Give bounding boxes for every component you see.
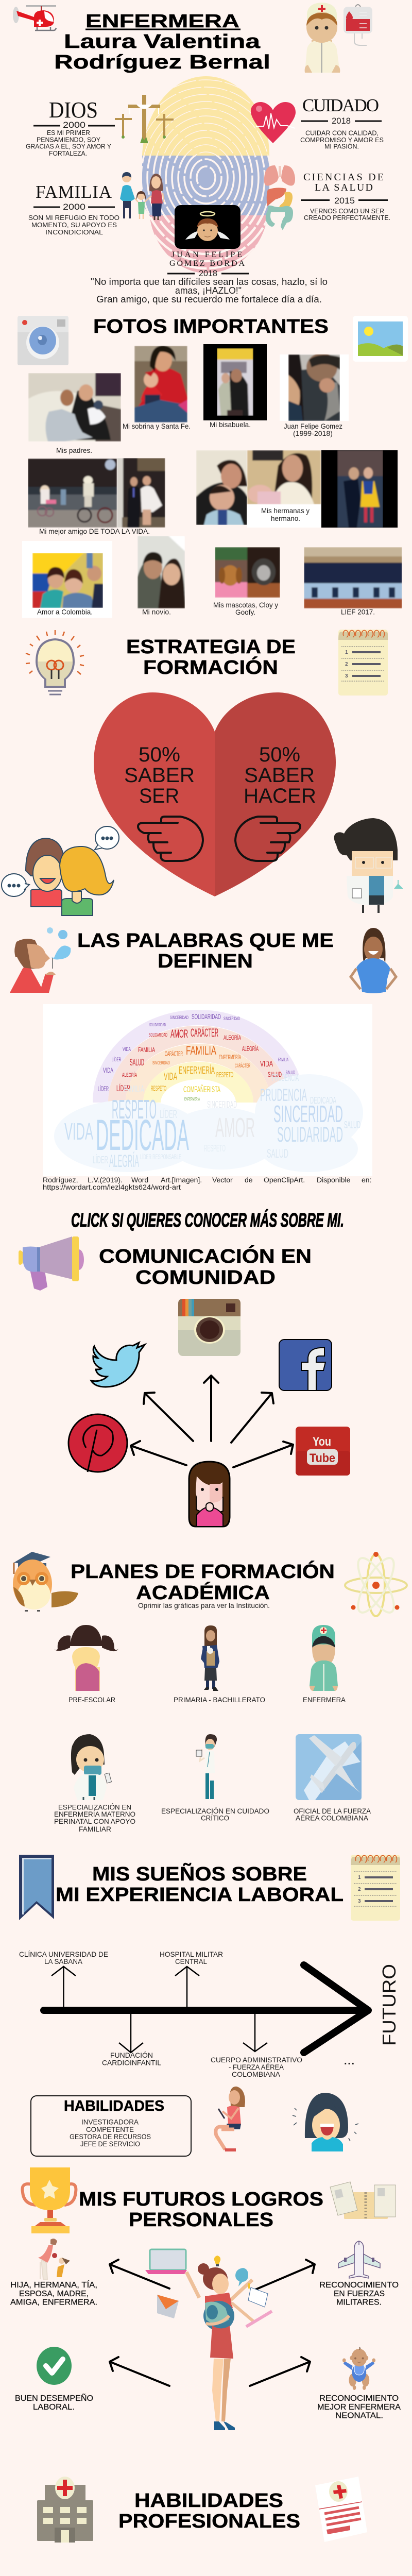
milestones: FUNDACIÓN xyxy=(110,2051,153,2059)
photo: mi novio xyxy=(138,536,185,608)
title: Laura Valentina xyxy=(64,31,261,53)
milestones: COLOMBIANA xyxy=(232,2070,281,2078)
captions: row 3 xyxy=(37,601,375,616)
labels: formacion row 1: PRIMARIA - BACHILLERATO xyxy=(174,1696,265,1704)
label: familia futura: HIJA, HERMANA, TÍA, xyxy=(10,2280,97,2290)
heading: las palabras que me definen: LAS PALABRAS QUE ME xyxy=(77,930,334,952)
words: CARÁCTER xyxy=(165,1049,183,1058)
panel: word cloud: SALUD xyxy=(344,1120,360,1131)
panel: habilidades: COMPETENTE xyxy=(86,2125,134,2133)
panel: cuidado: CUIDAR CON CALIDAD, xyxy=(305,129,379,137)
panel: ciencias de la salud xyxy=(301,172,390,222)
labels: formacion row 1: PRE-ESCOLAR xyxy=(68,1696,115,1704)
label: reconocimiento militar: EN FUERZAS xyxy=(334,2290,385,2298)
words: FAMILIA xyxy=(124,1084,144,1094)
panel: habilidades: INVESTIGADORA xyxy=(81,2117,139,2126)
panel: juan felipe: GÓMEZ BORDA xyxy=(169,258,245,268)
photo: amor a colombia xyxy=(22,541,112,618)
words: ENFERMERÍA xyxy=(184,1097,200,1101)
panel: cuidado: MI PASIÓN. xyxy=(324,142,359,150)
panel: word cloud xyxy=(43,1004,372,1176)
icon: woman blowing bubbles xyxy=(10,927,71,993)
quote: amas, ¡HAZLO!" xyxy=(175,285,242,296)
citation: word art: Word xyxy=(131,1176,148,1184)
photo: bicicletas xyxy=(28,459,117,528)
icon: organs xyxy=(264,165,295,230)
icon: notepad xyxy=(351,1855,400,1921)
icon: bookmark xyxy=(19,1855,54,1920)
icon: notepad: 1 xyxy=(345,650,348,655)
panel: dios: FORTALEZA. xyxy=(49,149,87,157)
label: reconocimiento neonatal: NEONATAL. xyxy=(335,2411,383,2420)
words: SOLIDARIDAD xyxy=(149,1023,166,1027)
icon: youtube: You xyxy=(313,1435,331,1449)
words: ALEGRÍA xyxy=(122,1072,137,1078)
words: CARÁCTER xyxy=(235,1062,250,1069)
photo: sobrino xyxy=(196,450,247,525)
labels: formacion row 2: FAMILIAR xyxy=(79,1825,111,1833)
panel: familia xyxy=(28,182,119,236)
title: Rodríguez Bernal xyxy=(54,52,270,73)
icon: youtube: Tube xyxy=(310,1451,335,1465)
words: SALUD xyxy=(268,1070,282,1078)
captions: row 1: Mis padres. xyxy=(56,446,92,454)
words: PRUDENCIA xyxy=(272,1073,299,1083)
photo: hermanas xyxy=(247,450,321,504)
panel: ciencias de la salud: CIENCIAS DE xyxy=(303,172,384,183)
icon: megaphone xyxy=(19,1236,84,1291)
words: LÍDER xyxy=(160,1108,177,1121)
milestones: - FUERZA AÉREA xyxy=(229,2063,284,2071)
label: reconocimiento militar: RECONOCIMIENTO xyxy=(319,2281,399,2290)
icon: picture xyxy=(353,316,408,362)
label: saber ser: SER xyxy=(139,785,179,807)
item: oficial fuerza aerea xyxy=(296,1734,362,1800)
heading: comunicacion en comunidad: COMUNICACIÓN EN xyxy=(99,1245,312,1267)
labels: formacion row 1 xyxy=(68,1696,346,1704)
words: SINCERIDAD xyxy=(207,1099,237,1110)
panel: cuidado xyxy=(300,95,384,150)
icon: notepad: 2 xyxy=(345,662,348,667)
citation: url: https://wordart.com/lezl4gkts624/word-art xyxy=(43,1183,181,1191)
words: SINCERIDAD xyxy=(170,1015,188,1020)
photo: mi mejor amigo xyxy=(117,458,165,528)
panel: cuidado: COMPROMISO Y AMOR ES xyxy=(300,136,384,144)
words: SINCERIDAD xyxy=(152,1060,170,1065)
icon: camera xyxy=(18,316,68,365)
labels: formacion row 2: OFICIAL DE LA FUERZA xyxy=(294,1807,371,1815)
panel: familia: INCONDICIONAL xyxy=(45,228,103,236)
panel: familia: 2000 xyxy=(63,202,85,212)
panel: cuidado: 2018 xyxy=(332,116,351,126)
heading: mis futuros logros: MIS FUTUROS LOGROS xyxy=(79,2189,323,2210)
citation: word art: L.V.(2019). xyxy=(88,1176,123,1184)
captions: row 1: Juan Felipe Gomez xyxy=(284,422,342,430)
heading: estrategia de formacion: FORMACIÓN xyxy=(143,656,278,679)
words: VIDA xyxy=(64,1118,93,1145)
words: LÍDER xyxy=(116,1083,130,1093)
item: especializacion cuidado critico xyxy=(196,1734,217,1799)
panel: ciencias de la salud: 2015 xyxy=(334,196,355,206)
icon: three crosses xyxy=(115,95,174,143)
icon: girl sitting with phone xyxy=(216,2087,245,2151)
labels: formacion row 2: CRÍTICO xyxy=(201,1814,229,1822)
heading: mis futuros logros: PERSONALES xyxy=(129,2209,273,2231)
panel: dios: GRACIAS A EL, SOY AMOR Y xyxy=(26,142,111,150)
panel: familia: MOMENTO, SU APOYO ES xyxy=(31,221,117,229)
icon: nurse xyxy=(305,3,340,73)
words: ALEGRÍA xyxy=(242,1045,259,1053)
captions: row 1: (1999-2018) xyxy=(293,429,333,437)
photo: mi sobrina xyxy=(134,346,187,422)
panel: familia: FAMILIA xyxy=(36,182,112,202)
heading: planes de formacion academica: Oprimir las gráficas para ver la Institución. xyxy=(138,1601,270,1609)
item: familia futura xyxy=(38,2239,70,2279)
milestones: LA SABANA xyxy=(44,1957,83,1965)
words: VIDA xyxy=(123,1046,131,1053)
photo: juan felipe gomez xyxy=(280,353,349,421)
icon: pointing hand right xyxy=(235,817,300,861)
milestones: CARDIOINFANTIL xyxy=(102,2059,161,2067)
labels: formacion row 2 xyxy=(54,1803,371,1833)
panel: ciencias de la salud: LA SALUD xyxy=(315,182,373,193)
caption: mi mejor amigo: Mi mejor amigo DE TODA LA VIDA. xyxy=(39,527,150,535)
panel: dios: ES MI PRIMER xyxy=(47,129,90,137)
icon: blood bag xyxy=(344,5,372,45)
title xyxy=(54,10,270,73)
icon: airplane xyxy=(338,2241,380,2278)
chart: heart 50/50 xyxy=(94,692,336,896)
heading: las palabras que me definen: DEFINEN xyxy=(158,951,253,972)
icon: notepad xyxy=(338,630,388,696)
caption: hermanas xyxy=(247,504,321,528)
labels: formacion row 2: ENFERMERÍA MATERNO xyxy=(54,1810,135,1818)
label: reconocimiento militar: MILITARES. xyxy=(336,2298,382,2307)
words: FAMILIA xyxy=(138,1046,155,1054)
quote: "No importa que tan difíciles sean las cosas, hazlo, sí lo xyxy=(91,277,328,287)
item: primaria bachillerato xyxy=(201,1625,219,1691)
icon: curriculum documents xyxy=(330,2182,396,2219)
milestones: CUERPO ADMINISTRATIVO xyxy=(211,2056,302,2064)
words xyxy=(64,1012,360,1171)
milestones xyxy=(19,1950,354,2078)
icon: multitasking woman xyxy=(145,2249,272,2430)
words: SINCERIDAD xyxy=(224,1016,240,1021)
citation: word art: Vector xyxy=(212,1176,233,1184)
icon: smiling woman xyxy=(293,2093,358,2151)
icon: baby xyxy=(342,2347,375,2390)
heading: planes de formacion academica: PLANES DE FORMACIÓN xyxy=(71,1560,335,1583)
icon: facebook xyxy=(279,1340,332,1391)
citation: word art: OpenClipArt. xyxy=(264,1176,305,1184)
panel: habilidades: JEFE DE SERVICIO xyxy=(80,2140,140,2148)
label: buen desempeno xyxy=(15,2393,93,2412)
icon: medical sheet xyxy=(315,2477,367,2542)
panel: dios: 2000 xyxy=(63,120,85,130)
icon: notepad: 1 xyxy=(358,1875,361,1880)
label: saber ser xyxy=(124,743,195,807)
icon: hospital xyxy=(37,2477,93,2543)
icon: angel on black panel xyxy=(175,205,241,249)
words: LÍDER xyxy=(98,1084,109,1093)
words: ALEGRÍA xyxy=(224,1033,241,1041)
icon: youtube xyxy=(296,1427,350,1476)
item: pre-escolar xyxy=(54,1625,118,1691)
heading: estrategia de formacion: ESTRATEGIA DE xyxy=(126,636,296,658)
captions: row 3: Mi novio. xyxy=(142,608,171,616)
label: saber hacer xyxy=(244,743,316,807)
heading: comunicacion en comunidad: COMUNIDAD xyxy=(135,1267,276,1289)
heading: mis suenos: MIS SUEÑOS SOBRE xyxy=(92,1862,307,1885)
caption: hermanas: Mis hermanas y xyxy=(261,506,310,515)
panel: habilidades: HABILIDADES xyxy=(64,2098,164,2114)
branch arrows xyxy=(52,1967,267,2053)
icon: check mark xyxy=(37,2347,72,2385)
panel: habilidades: GESTORA DE RECURSOS xyxy=(70,2132,151,2141)
label: familia futura xyxy=(10,2280,97,2307)
icon: twitter xyxy=(91,1343,145,1387)
label: reconocimiento neonatal: MEJOR ENFERMERA xyxy=(317,2403,401,2412)
label: saber hacer: SABER xyxy=(244,764,315,787)
words: LÍDER RESPONSABLE xyxy=(140,1153,181,1161)
icon: scientist xyxy=(334,818,403,913)
words: VIDA xyxy=(260,1060,273,1069)
panel: ciencias de la salud: VERNOS COMO UN SER xyxy=(310,207,384,215)
heading: habilidades profesionales: HABILIDADES xyxy=(134,2490,283,2512)
words: ENFERMERÍA xyxy=(179,1064,215,1076)
title: ENFERMERA xyxy=(85,10,239,31)
citation: word art: en: xyxy=(362,1176,371,1184)
quote xyxy=(91,277,328,304)
photo: lief 2017 xyxy=(304,547,402,608)
label: familia futura: ESPOSA, MADRE, xyxy=(19,2290,89,2298)
captions: row 3: Amor a Colombia. xyxy=(37,608,93,616)
labels: formacion row 2: ESPECIALIZACIÓN EN CUIDADO xyxy=(161,1807,269,1815)
panel: familia: SON MI REFUGIO EN TODO xyxy=(28,214,119,222)
label: saber hacer: 50% xyxy=(259,743,300,766)
icon: instagram xyxy=(178,1299,241,1356)
rainbow xyxy=(100,1018,296,1103)
arrows: comunicacion xyxy=(131,1376,293,1467)
milestones: ... xyxy=(344,2056,354,2067)
words: AMOR xyxy=(215,1112,255,1143)
icon: notepad: 2 xyxy=(358,1887,361,1892)
heading: comunicacion en comunidad xyxy=(99,1245,312,1289)
citation: word art: Rodríguez, xyxy=(43,1176,78,1184)
clouds xyxy=(54,1074,363,1172)
heading: habilidades profesionales: PROFESIONALES xyxy=(118,2511,300,2532)
heading: las palabras que me definen xyxy=(77,930,334,972)
timeline xyxy=(19,1950,368,2078)
words: DEDICADA xyxy=(96,1111,189,1159)
captions: row 3: LIEF 2017. xyxy=(341,608,375,616)
citation: word art: Disponible xyxy=(317,1176,351,1184)
captions: row 1: Mi sobrina y Santa Fe. xyxy=(123,422,191,430)
captions: row 1: Mi bisabuela. xyxy=(210,420,251,429)
panel: ciencias de la salud: CREADO PERFECTAMENTE. xyxy=(304,214,390,222)
icon: notepad: 3 xyxy=(345,673,348,679)
words: DEDICADA xyxy=(310,1095,336,1106)
label: reconocimiento militar xyxy=(319,2281,399,2307)
words: SALUD xyxy=(130,1057,144,1067)
label: buen desempeno: LABORAL. xyxy=(33,2403,75,2412)
words: ALEGRÍA xyxy=(109,1151,139,1171)
icon: light bulb xyxy=(26,630,84,694)
citation: word art: Art.[Imagen]. xyxy=(161,1176,202,1184)
heading: planes de formacion academica xyxy=(71,1560,335,1609)
words: FAMILIA xyxy=(278,1057,288,1063)
labels: formacion row 2: ESPECIALIZACIÓN EN xyxy=(58,1803,131,1811)
panel: dios: PENSAMIENDO, SOY xyxy=(37,136,100,143)
heading: mis suenos xyxy=(56,1862,344,1906)
icon: girl with long hair xyxy=(189,1462,230,1527)
label: saber ser: SABER xyxy=(124,764,195,787)
photo: mi bisabuela xyxy=(203,344,267,420)
caption: hermanas: hermano. xyxy=(271,514,300,522)
panel: juan felipe: 2018 xyxy=(199,268,217,278)
captions: row 1 xyxy=(56,420,342,454)
label: saber ser: 50% xyxy=(139,743,180,766)
fingerprint Colombia xyxy=(142,76,269,273)
heading: fotos importantes: FOTOS IMPORTANTES xyxy=(93,316,329,337)
heading: planes de formacion academica: ACADÉMICA xyxy=(136,1581,270,1604)
words: RESPETO xyxy=(151,1084,166,1092)
item: enfermera xyxy=(310,1625,338,1691)
labels: formacion row 2: PERINATAL CON APOYO xyxy=(54,1817,135,1825)
label: familia futura: AMIGA, ENFERMERA. xyxy=(10,2298,97,2307)
label: futuro: FUTURO xyxy=(379,1964,400,2046)
icon: pinterest xyxy=(68,1414,127,1472)
icon: heart with pulse xyxy=(251,102,296,143)
words: RESPETO xyxy=(216,1071,233,1079)
heading: mis futuros logros xyxy=(79,2189,323,2231)
photo: disfraces xyxy=(321,450,398,528)
label: reconocimiento neonatal xyxy=(317,2394,401,2420)
icon: helicopter xyxy=(13,5,56,30)
captions: row 3: Goofy. xyxy=(235,608,255,616)
heading: estrategia de formacion xyxy=(126,636,296,679)
words: COMPAÑERISTA xyxy=(183,1084,220,1094)
timeline arrow xyxy=(44,1965,368,2053)
labels: formacion row 1: ENFERMERA xyxy=(303,1696,346,1704)
words: RESPETO xyxy=(112,1095,157,1125)
icon: family xyxy=(120,172,164,220)
words: SALUD xyxy=(286,1070,295,1076)
words: RESPETO xyxy=(204,1143,226,1154)
words: SALUD xyxy=(267,1147,288,1161)
icon: trophy xyxy=(22,2167,76,2233)
label: buen desempeno: BUEN DESEMPEÑO xyxy=(15,2393,93,2403)
photo: mis padres xyxy=(28,373,121,442)
panel: dios: DIOS xyxy=(49,97,98,123)
milestones: CLÍNICA UNIVERSIDAD DE xyxy=(19,1950,108,1958)
photo: mascotas xyxy=(215,547,280,598)
labels: formacion row 2: AÉREA COLOMBIANA xyxy=(296,1814,369,1822)
words: LÍDER xyxy=(93,1154,108,1166)
arrows: logros xyxy=(110,2260,315,2386)
words: VIDA xyxy=(164,1071,177,1082)
panel: cuidado: CUIDADO xyxy=(302,95,379,115)
captions: row 3: Mis mascotas, Cloy y xyxy=(213,601,278,609)
panel: dios xyxy=(26,97,115,157)
words: FAMILIA xyxy=(186,1044,216,1058)
words: SOLIDARIDAD xyxy=(149,1032,167,1038)
heading: mis suenos: MI EXPERIENCIA LABORAL xyxy=(56,1884,344,1906)
item: especializacion materno perinatal xyxy=(71,1734,111,1800)
quote: Gran amigo, que su recuerdo me fortalece día a día. xyxy=(96,294,322,304)
icon: smiling woman in blue xyxy=(351,928,396,993)
label: reconocimiento neonatal: RECONOCIMIENTO xyxy=(319,2394,399,2403)
panel: juan felipe: JUAN FELIPE xyxy=(171,250,242,259)
words: CARÁCTER xyxy=(191,1026,218,1039)
citation: word art: de xyxy=(245,1176,253,1184)
words: LÍDER xyxy=(112,1056,121,1063)
milestones: CENTRAL xyxy=(175,1957,207,1965)
icon: atom xyxy=(345,1552,407,1617)
panel: habilidades xyxy=(31,2096,191,2156)
words: VIDA xyxy=(103,1066,113,1074)
milestones: HOSPITAL MILITAR xyxy=(160,1950,223,1958)
words: AMOR xyxy=(170,1027,188,1040)
icon: owl xyxy=(13,1552,78,1612)
icon: pointing hand left xyxy=(138,817,203,861)
words: SOLIDARIDAD xyxy=(192,1012,221,1021)
words: ENFERMERÍA xyxy=(219,1053,241,1061)
icon: notepad: 3 xyxy=(358,1899,361,1904)
panel: juan felipe xyxy=(167,250,249,278)
words: PRUDENCIA xyxy=(260,1086,307,1105)
icon: two women talking xyxy=(2,826,119,916)
label: saber hacer: HACER xyxy=(244,785,316,807)
heading: habilidades profesionales xyxy=(118,2490,300,2532)
